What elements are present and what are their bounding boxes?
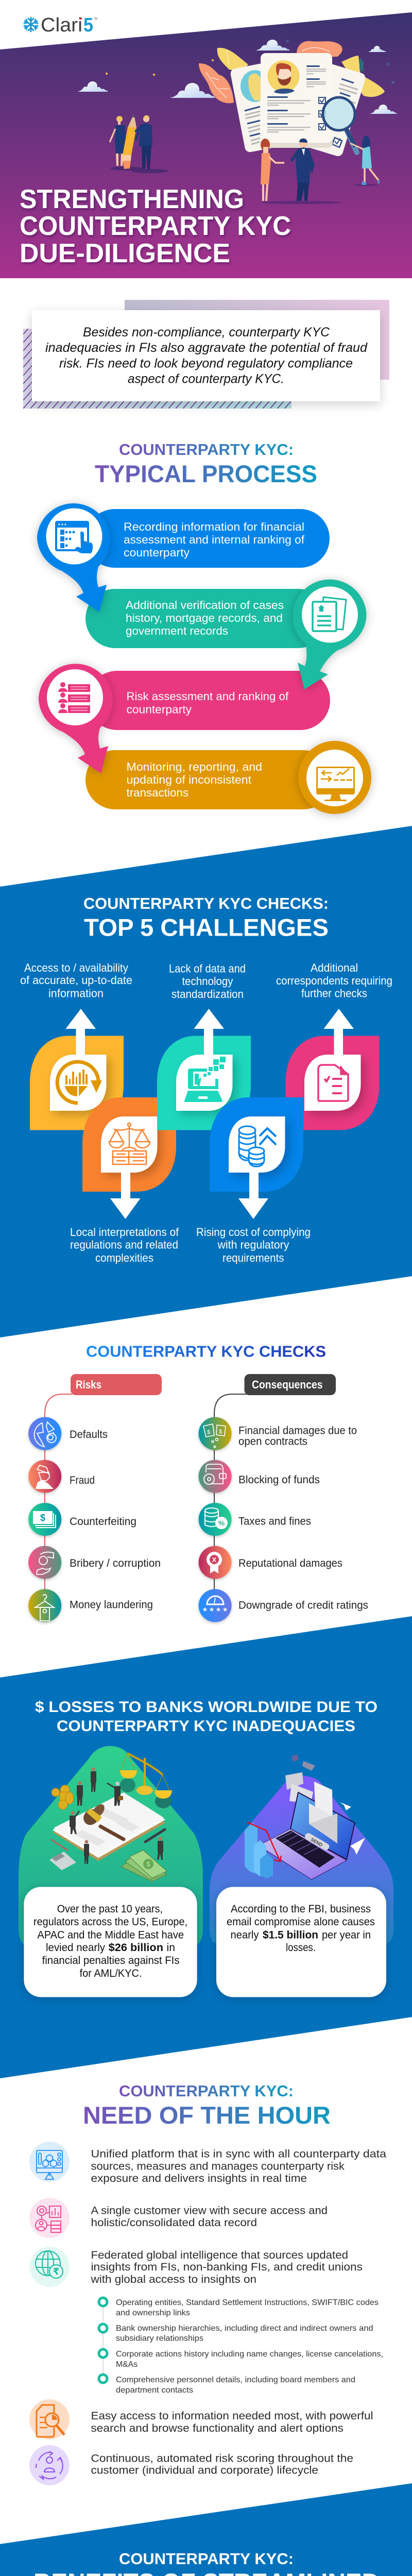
icon: customer view	[36, 2206, 61, 2232]
stat box: regulators	[24, 1887, 197, 1997]
consequence: financial damages: $	[207, 1429, 210, 1435]
consequence: credit ratings	[199, 1589, 368, 1622]
tag: consequences: Consequences	[252, 1378, 322, 1391]
heading: typical process	[95, 440, 317, 487]
risk: defaults	[28, 1417, 108, 1450]
logo: Clari5	[24, 14, 97, 36]
item: continuous scoring: Continuous, automated risk scoring throughout the	[91, 2452, 353, 2465]
illustration: legal scene	[49, 1753, 172, 1882]
coins	[52, 1785, 74, 1809]
paper planes	[340, 1802, 365, 1855]
card: regulators penalties	[19, 1746, 203, 1945]
consequence: blocking of funds	[199, 1460, 320, 1493]
icon: lifecycle	[36, 2451, 63, 2479]
consequence: taxes and fines	[199, 1503, 311, 1536]
people: pencil couple	[110, 114, 168, 173]
risk: bribery	[28, 1546, 161, 1579]
center profile card	[261, 53, 333, 148]
consequence: financial damages: Financial damages due to	[238, 1425, 357, 1436]
heading: need of the hour	[83, 2082, 331, 2129]
bullet: personnel details: Comprehensive personnel details, including board members and	[116, 2376, 355, 2384]
challenge: data availability	[30, 1009, 124, 1130]
envelopes	[285, 1755, 315, 1803]
challenge labels top: of accurate, up-to-date	[20, 974, 132, 987]
step 2	[85, 580, 367, 689]
tag: risks	[71, 1374, 162, 1395]
stat box: regulators: levied nearly	[46, 1942, 105, 1954]
laptop screen	[290, 1792, 355, 1859]
step 2: Additional verification of cases	[126, 599, 284, 612]
risk: counterfeiting	[28, 1503, 136, 1536]
challenge labels bottom: Local interpretations of	[70, 1226, 179, 1239]
step 1: counterparty	[124, 546, 190, 559]
illustration: laptop and email	[245, 1755, 365, 1879]
consequence: financial damages: $	[219, 1429, 222, 1435]
heading: need of the hour: NEED OF THE HOUR	[83, 2102, 331, 2129]
heading: top 5 challenges	[83, 894, 329, 941]
step 2: government records	[126, 624, 228, 637]
heading: KYC checks: COUNTERPARTY KYC CHECKS	[86, 1343, 326, 1360]
people: handshake pair	[261, 139, 341, 204]
item: easy access: search and browse functionality and alert options	[91, 2422, 344, 2434]
column: risks	[28, 1374, 162, 1622]
panel: process steps	[37, 503, 371, 814]
stat box: regulators: regulators across the US, Europe,	[33, 1916, 187, 1928]
icon: ranked profiles	[58, 682, 90, 713]
item: continuous scoring: customer (individual and corporate) lifecycle	[91, 2465, 318, 2476]
icon: checklist	[318, 1065, 348, 1101]
bullet: corporate actions: M&As	[116, 2360, 138, 2369]
send button: SEND	[310, 1837, 324, 1848]
heading: benefits: COUNTERPARTY KYC:	[119, 2550, 294, 2568]
logo: Clari5: TM	[94, 18, 97, 21]
icon: globe with rupee	[36, 2251, 63, 2278]
stat box: regulators: for AML/KYC.	[80, 1968, 142, 1979]
falling bars and arrow	[245, 1822, 281, 1878]
banknotes	[121, 1850, 167, 1882]
risk: counterfeiting: $	[40, 1513, 45, 1523]
heading: need of the hour: COUNTERPARTY KYC:	[119, 2082, 294, 2100]
heading: benefits	[33, 2550, 380, 2576]
stat box: email compromise: nearly	[231, 1929, 259, 1941]
step 2: history, mortgage records, and	[126, 612, 283, 624]
item: easy access	[29, 2399, 373, 2439]
item: federated intelligence	[29, 2247, 363, 2287]
hero illustration	[77, 40, 397, 204]
step 4: Monitoring, reporting, and	[127, 760, 262, 773]
icon: monitor with blocks	[184, 1057, 226, 1102]
item: federated intelligence: with global access to insights on	[90, 2274, 256, 2285]
logo: Clari5: 5	[83, 14, 93, 36]
icon: dashboard	[37, 2150, 62, 2179]
challenge: local interpretations	[82, 1097, 176, 1219]
bullet: corporate actions	[99, 2349, 383, 2369]
step 4: updating of inconsistent	[127, 773, 251, 786]
challenge labels bottom: Rising cost of complying	[196, 1226, 311, 1239]
heading: typical process: COUNTERPARTY KYC:	[119, 440, 294, 459]
panel: need of the hour	[29, 2082, 386, 2485]
column: consequences	[199, 1374, 368, 1622]
heading: losses	[35, 1699, 377, 1735]
consequence: financial damages	[199, 1417, 357, 1450]
card: business email compromise	[210, 1755, 393, 1943]
stat box: regulators: in	[167, 1942, 175, 1954]
title: STRENGTHENING	[20, 184, 244, 214]
risk: fraud: Fraud	[70, 1475, 95, 1486]
panel: dollar losses	[0, 1616, 412, 2078]
bullet: personnel details: department contacts	[116, 2386, 193, 2395]
open envelope and letter	[309, 1782, 337, 1843]
challenge labels bottom: regulations and related	[70, 1239, 178, 1251]
heading: top 5 challenges: TOP 5 CHALLENGES	[84, 914, 329, 941]
panel: benefits	[0, 2483, 412, 2576]
consequence: reputational damages	[199, 1546, 342, 1579]
step 3: Risk assessment and ranking of	[127, 690, 289, 703]
item: federated intelligence: insights from FIs, non-banking FIs, and credit unions	[91, 2261, 363, 2273]
intro text: inadequacies in FIs also aggravate the potential of fraud	[45, 341, 368, 355]
intro text: aspect of counterparty KYC.	[128, 372, 284, 386]
clouds	[77, 40, 397, 114]
logo: Clari5: Clari	[41, 14, 82, 36]
challenge labels top: standardization	[171, 988, 244, 1001]
stat box: email compromise: $1.5 billion	[263, 1929, 318, 1941]
risk: fraud	[28, 1460, 95, 1493]
icon: coins and chevrons	[239, 1126, 276, 1166]
bullet: operating entities: Operating entities, Standard Settlement Instructions, SWIFT/BIC codes	[116, 2298, 379, 2307]
icon: chart cycle	[57, 1062, 98, 1103]
step 1: assessment and internal ranking of	[124, 533, 305, 546]
item: single customer view	[29, 2198, 328, 2238]
consequence: reputational damages: Reputational damages	[238, 1557, 342, 1569]
heading: typical process: TYPICAL PROCESS	[95, 460, 317, 487]
icon: monitor	[316, 767, 355, 801]
panel: top 5 challenges	[0, 826, 412, 1337]
step 4: transactions	[127, 786, 188, 799]
consequence: taxes and fines: Taxes and fines	[238, 1516, 311, 1527]
item: continuous scoring	[29, 2445, 353, 2485]
panel: intro callout	[23, 300, 389, 409]
step 4	[85, 741, 371, 814]
consequence: blocking of funds: Blocking of funds	[238, 1474, 320, 1486]
title: COUNTERPARTY KYC	[20, 211, 291, 241]
bullet: bank ownership: Bank ownership hierarchies, including direct and indirect owners and	[116, 2324, 373, 2333]
panel: hero header	[0, 12, 412, 278]
challenge: data standardization	[157, 1009, 251, 1130]
item: unified platform: Unified platform that is in sync with all counterparty data	[91, 2148, 386, 2160]
bullet: operating entities	[99, 2298, 379, 2317]
stat box: regulators: $26 billion	[109, 1942, 163, 1954]
challenge labels bottom: complexities	[95, 1251, 153, 1264]
tag: consequences	[244, 1374, 336, 1395]
challenge labels bottom	[70, 1226, 311, 1264]
icon: scales on books	[109, 1123, 150, 1164]
heading: losses: COUNTERPARTY KYC INADEQUACIES	[57, 1718, 355, 1735]
step 1	[37, 503, 330, 612]
icon: document search	[37, 2405, 64, 2437]
step 3: counterparty	[127, 703, 192, 716]
stat box: email compromise: email compromise alone causes	[227, 1916, 375, 1928]
sub list: global insights	[99, 2298, 383, 2395]
risk: money laundering	[28, 1589, 153, 1622]
item: federated intelligence: ₹	[53, 2266, 59, 2277]
title	[20, 184, 291, 268]
stat box: email compromise	[216, 1887, 386, 1997]
document stack	[53, 1792, 165, 1861]
banknotes: $	[146, 1860, 150, 1868]
heading: losses: $ LOSSES TO BANKS WORLDWIDE DUE TO	[35, 1699, 377, 1716]
challenge labels bottom: requirements	[222, 1251, 284, 1264]
bullet: corporate actions: Corporate actions history including name changes, license cancelations,	[116, 2350, 383, 2359]
stat box: regulators: financial penalties against FIs	[42, 1955, 179, 1967]
left profile card	[230, 56, 317, 153]
consequence: credit ratings: Downgrade of credit ratings	[238, 1599, 368, 1612]
risk: bribery: Bribery / corruption	[70, 1557, 161, 1569]
decorative leaves	[199, 41, 385, 103]
intro text: risk. FIs need to look beyond regulatory compliance	[59, 357, 353, 371]
bullet: bank ownership	[99, 2324, 373, 2343]
step 1: Recording information for financial	[124, 520, 304, 533]
lawyers	[70, 1767, 163, 1864]
consequence: reputational damages: X	[212, 1556, 217, 1564]
bullet: operating entities: and ownership links	[116, 2309, 190, 2317]
consequence: credit ratings: ★★★★	[202, 1606, 228, 1613]
intro text	[45, 325, 368, 386]
challenge labels bottom: with regulatory	[217, 1239, 289, 1251]
person with magnifier	[350, 135, 380, 186]
risk: money laundering: Money laundering	[70, 1599, 153, 1611]
risk: counterfeiting: Counterfeiting	[70, 1516, 136, 1528]
item: unified platform: sources, measures and manages counterparty risk	[91, 2161, 345, 2173]
right profile card	[272, 54, 367, 158]
challenge labels top: Lack of data and	[169, 962, 246, 975]
scale of justice	[120, 1753, 172, 1808]
challenge labels top: information	[48, 987, 104, 999]
laptop base	[259, 1829, 347, 1879]
challenge: rising cost	[210, 1097, 303, 1219]
challenge labels top: Access to / availability	[24, 961, 128, 974]
calculator, pen, pencil	[49, 1829, 165, 1870]
gavel	[80, 1802, 124, 1839]
item: easy access: Easy access to information needed most, with powerful	[91, 2410, 373, 2422]
challenge: regulatory	[285, 1009, 379, 1130]
icon: rating screen	[55, 521, 93, 553]
challenge labels top	[20, 961, 392, 1001]
send button	[304, 1832, 331, 1851]
intro text: Besides non-compliance, counterparty KYC	[83, 325, 330, 340]
item: single customer view: holistic/consolidated data record	[91, 2217, 257, 2229]
tag: risks: Risks	[76, 1378, 101, 1391]
challenge labels top: technology	[182, 975, 233, 988]
risk: defaults: Defaults	[70, 1429, 108, 1440]
challenge labels top: correspondents requiring	[276, 974, 392, 987]
consequence: financial damages: open contracts	[238, 1435, 307, 1448]
panel: risks and consequences	[28, 1343, 368, 1622]
bullet: personnel details	[99, 2375, 355, 2395]
bullet: bank ownership: subsidiary relationships	[116, 2334, 203, 2343]
heading: top 5 challenges: COUNTERPARTY KYC CHECKS:	[83, 894, 329, 912]
icon: records	[313, 597, 346, 631]
stat box: email compromise: per year in	[322, 1929, 371, 1941]
item: unified platform	[29, 2142, 386, 2184]
item: single customer view: A single customer view with secure access and	[91, 2205, 328, 2216]
consequence: taxes and fines: %	[218, 1519, 225, 1527]
step 3	[39, 664, 330, 773]
magnifying glass	[323, 97, 357, 152]
item: unified platform: exposure and delivers insights in real time	[91, 2173, 307, 2184]
item: federated intelligence: Federated global intelligence that sources updated	[91, 2249, 348, 2261]
stat box: regulators: Over the past 10 years,	[57, 1903, 163, 1915]
stat box: email compromise: losses.	[286, 1942, 316, 1954]
challenge labels top: further checks	[301, 987, 367, 999]
stat box: email compromise: According to the FBI, business	[231, 1903, 371, 1915]
challenge labels top: Additional	[311, 961, 358, 974]
title: DUE-DILIGENCE	[20, 239, 230, 268]
stat box: regulators: APAC and the Middle East have	[37, 1929, 184, 1941]
